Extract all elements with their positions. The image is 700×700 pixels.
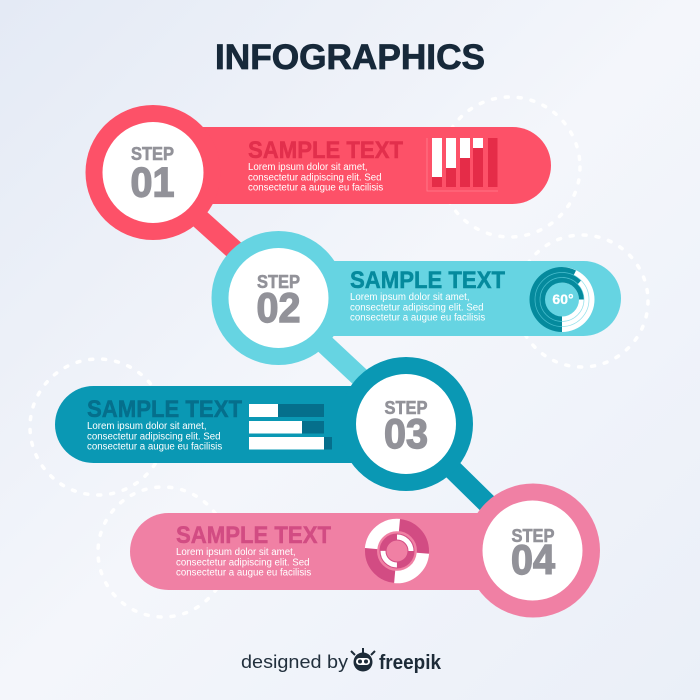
badge 2: STEP [257, 272, 300, 292]
panel: step 04 [130, 484, 600, 618]
badge 3: 03 [384, 410, 428, 457]
ring 4 [466, 484, 600, 618]
footer credit [241, 648, 442, 674]
connector: step 2 to 3 [316, 336, 376, 392]
text block 2: consectetur a augue eu facilisis [350, 312, 485, 324]
panel: step 02 [212, 231, 621, 365]
footer credit: designed by [241, 651, 349, 672]
text block 3: Lorem ipsum dolor sit amet, [87, 421, 207, 432]
gauge label: 60° [552, 291, 574, 307]
heading 4: SAMPLE TEXT [176, 522, 331, 549]
badge 1 [102, 122, 204, 223]
chart: stacked bars [427, 138, 498, 191]
heading 2: SAMPLE TEXT [350, 267, 505, 294]
title: INFOGRAPHICS [215, 38, 485, 77]
text block 3: consectetur a augue eu facilisis [87, 442, 222, 452]
text block 2: consectetur adipiscing elit. Sed [350, 302, 484, 314]
heading 1: SAMPLE TEXT [248, 137, 403, 164]
text block 1: Lorem ipsum dolor sit amet, [248, 162, 368, 173]
badge 4 [482, 500, 582, 600]
text block 4: consectetur a augue eu facilisis [176, 568, 311, 578]
text block 3: consectetur adipiscing elit. Sed [87, 432, 221, 442]
decorative dashed circles [30, 97, 648, 617]
text block 1: consectetur adipiscing elit. Sed [248, 172, 382, 184]
badge 2 [228, 248, 328, 348]
chart: radial gauge 60 degrees [530, 267, 594, 332]
badge 2: 02 [256, 284, 300, 331]
badge 3 [356, 374, 456, 474]
ring 1 [86, 105, 220, 240]
heading 3: SAMPLE TEXT [87, 396, 242, 423]
badge 3: STEP [384, 398, 428, 418]
chart: horizontal bars [249, 404, 332, 450]
text block 2: Lorem ipsum dolor sit amet, [350, 292, 470, 303]
connector: step 3 to 4 [445, 462, 502, 518]
footer credit: freepik [379, 652, 442, 674]
icon: freepik mascot [351, 648, 375, 672]
text block 4: Lorem ipsum dolor sit amet, [176, 547, 296, 558]
badge 4: 04 [511, 536, 556, 583]
chart: segmented rings [369, 523, 425, 579]
panel: step 03 [55, 357, 473, 491]
connector: step 1 to 2 [190, 210, 250, 264]
badge 1: STEP [131, 144, 174, 164]
badge 4: STEP [512, 526, 554, 546]
band 4 [130, 513, 530, 590]
text block 1: consectetur a augue eu facilisis [248, 182, 383, 194]
band 3 [55, 386, 405, 463]
band 1 [150, 127, 551, 204]
text block 4: consectetur adipiscing elit. Sed [176, 558, 310, 568]
ring 2 [212, 231, 346, 365]
ring 3 [339, 357, 473, 491]
panel: step 01 [86, 105, 551, 240]
badge 1: 01 [130, 158, 174, 206]
band 2 [280, 261, 621, 336]
